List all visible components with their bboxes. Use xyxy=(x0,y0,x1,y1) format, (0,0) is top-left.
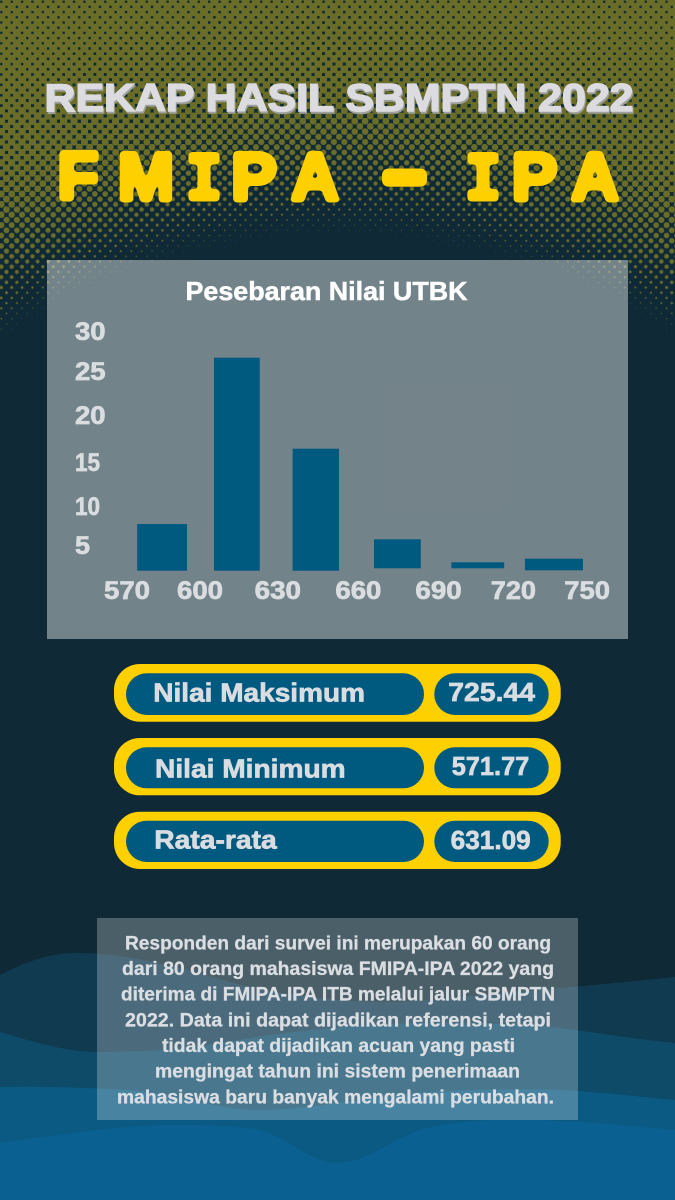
y axis labels: 15 xyxy=(75,449,100,477)
x axis labels: 630 xyxy=(255,577,301,605)
stat: rata-rata: Rata-rata xyxy=(154,824,277,854)
note text: diterima di FMIPA-IPA ITB melalui jalur SBMPTN xyxy=(121,984,555,1006)
x axis labels: 750 xyxy=(564,577,610,605)
y axis labels: 10 xyxy=(75,493,100,521)
x axis labels: 660 xyxy=(335,577,381,605)
stat: nilai minimum: Nilai Minimum xyxy=(155,753,346,783)
x axis labels: 720 xyxy=(491,577,536,605)
stat: nilai maksimum xyxy=(114,664,561,722)
panel: survey note xyxy=(97,918,578,1120)
note text xyxy=(117,932,555,1108)
panel: histogram xyxy=(47,260,628,639)
heading: FMIPA - IPA: M xyxy=(118,139,174,215)
y axis labels: 30 xyxy=(75,318,106,346)
note text: tidak dapat dijadikan acuan yang pasti xyxy=(162,1035,515,1057)
y axis labels: 25 xyxy=(75,358,106,386)
background halftone dots xyxy=(0,0,675,360)
note text: mengingat tahun ini sistem penerimaan xyxy=(155,1061,520,1083)
heading: FMIPA - IPA: A xyxy=(571,139,619,215)
heading: FMIPA - IPA xyxy=(57,135,619,220)
heading: FMIPA - IPA: I xyxy=(186,143,222,220)
x axis labels: 570 xyxy=(104,577,150,605)
background waves xyxy=(0,953,675,1200)
bars xyxy=(137,358,583,571)
stat: nilai maksimum: 725.44 xyxy=(448,677,536,707)
x axis labels xyxy=(104,577,610,605)
stat: nilai minimum xyxy=(114,738,561,795)
heading: FMIPA - IPA: P xyxy=(231,139,277,215)
x axis labels: 600 xyxy=(177,577,223,605)
stat: rata-rata: 631.09 xyxy=(451,825,531,855)
stat: nilai maksimum: Nilai Maksimum xyxy=(153,678,365,708)
chart title: Pesebaran Nilai UTBK xyxy=(186,276,468,306)
heading: FMIPA - IPA: – xyxy=(386,135,423,211)
stat: rata-rata xyxy=(114,812,561,869)
y axis labels xyxy=(75,318,106,560)
note text: Responden dari survei ini merupakan 60 orang xyxy=(125,932,551,954)
heading: FMIPA - IPA: A xyxy=(291,139,339,215)
heading: FMIPA - IPA: I xyxy=(465,143,501,220)
heading: FMIPA - IPA: P xyxy=(512,139,558,215)
stat: nilai minimum: 571.77 xyxy=(452,751,529,781)
y axis labels: 5 xyxy=(75,532,90,560)
heading: rekap hasil: REKAP HASIL SBMPTN 2022 xyxy=(44,77,633,120)
y axis labels: 20 xyxy=(75,402,106,430)
heading: FMIPA - IPA: F xyxy=(57,138,99,214)
heading: rekap hasil: REKAP HASIL SBMPTN 2022 xyxy=(46,79,634,122)
note text: mahasiswa baru banyak mengalami perubahan. xyxy=(117,1086,554,1108)
x axis labels: 690 xyxy=(415,577,462,605)
note text: 2022. Data ini dapat dijadikan referensi, tetapi xyxy=(125,1009,551,1031)
note text: dari 80 orang mahasiswa FMIPA-IPA 2022 yang xyxy=(122,958,554,980)
